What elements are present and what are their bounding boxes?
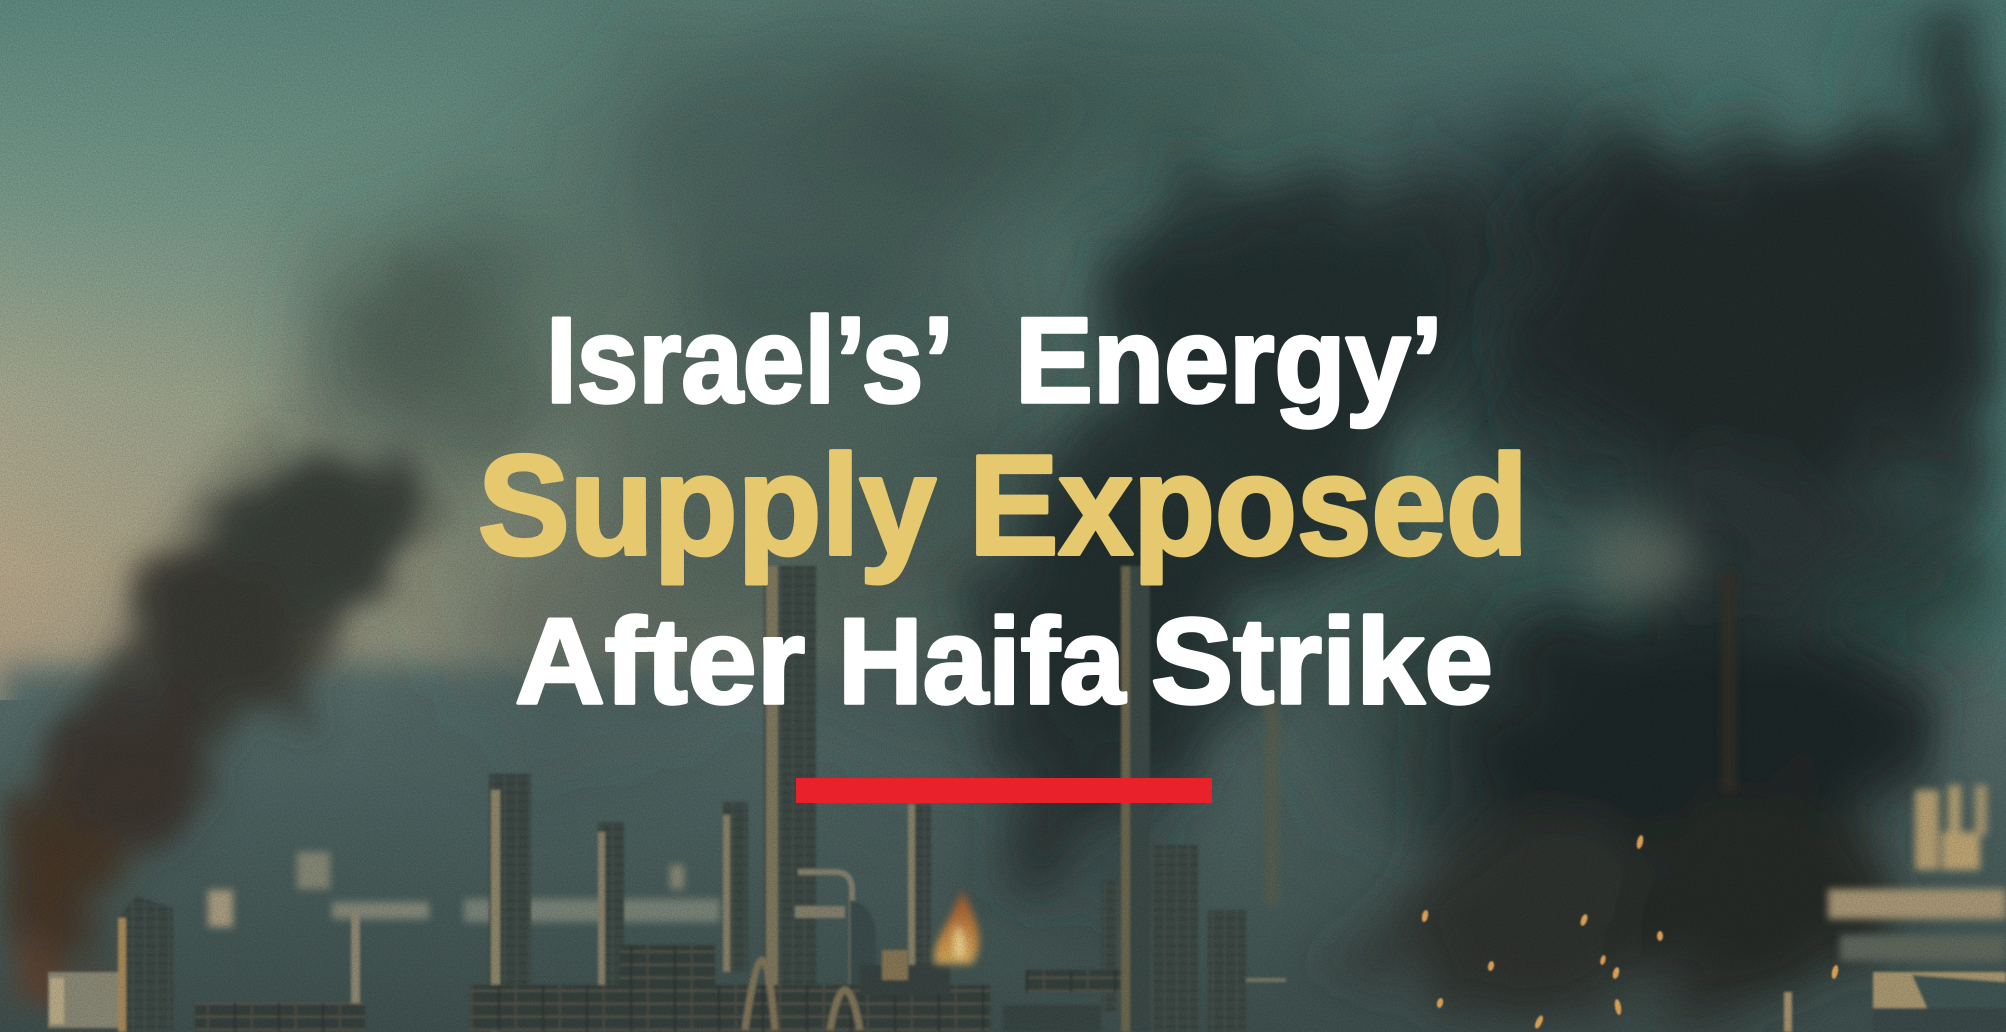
smoke: left plume	[0, 270, 480, 1032]
background: distant hills and land	[0, 650, 2006, 1032]
refinery: low pipework	[470, 945, 990, 1032]
title: line 3: After	[515, 593, 805, 729]
smoke: pale gap in the right column	[1585, 518, 1695, 602]
refinery: right chimney and lattice	[1003, 566, 1286, 1032]
refinery: left tank and tower	[48, 896, 365, 1032]
sparks	[1421, 835, 1839, 1030]
title: line 2 highlighted	[478, 426, 1528, 585]
title: line 2 highlighted: Exposed	[969, 426, 1528, 585]
smoke: central dark plume	[980, 150, 1510, 920]
background: distant buildings	[208, 785, 2006, 961]
refinery: faint far stacks	[1266, 572, 1736, 905]
red accent bar	[796, 778, 1212, 803]
buildings: lower right	[1784, 972, 2006, 1032]
title: line 1: Israel’s’	[546, 292, 954, 428]
refinery: main towers	[489, 566, 931, 1032]
title: line 3: Strike	[1151, 593, 1493, 729]
smoke: upper haze and central plume	[300, 20, 2000, 830]
title: line 3: Haifa	[838, 593, 1126, 729]
smoke: massive right column	[1370, 5, 2006, 1030]
title: line 2 highlighted: Supply	[478, 426, 936, 585]
fire at refinery	[934, 890, 979, 964]
title: line 3	[515, 593, 1493, 729]
title: line 1	[546, 292, 1443, 428]
title: line 1: Energy’	[1015, 292, 1443, 428]
